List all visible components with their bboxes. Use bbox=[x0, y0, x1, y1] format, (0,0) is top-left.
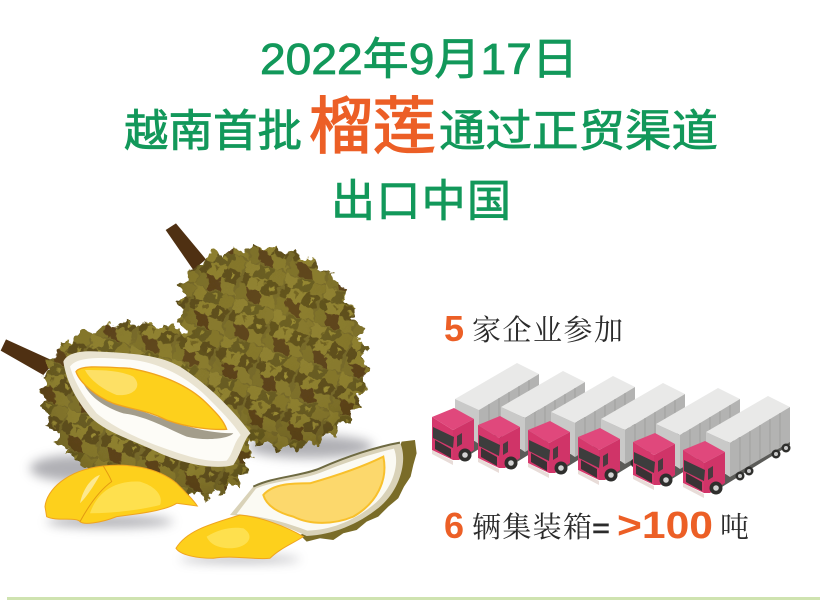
stat: containers and tonnage: 吨 bbox=[720, 511, 749, 544]
stat: companies: 5 bbox=[444, 308, 464, 349]
title line 2: first segment: 越南首批 bbox=[124, 107, 302, 156]
whole durian at back bbox=[166, 223, 369, 453]
flesh pieces left bbox=[45, 465, 197, 523]
segment pith bbox=[237, 449, 396, 531]
stat: containers and tonnage bbox=[444, 505, 749, 547]
title line 2: last segment: 通过正贸渠道 bbox=[439, 107, 718, 156]
flesh highlight bbox=[85, 370, 137, 395]
truck 6 bbox=[683, 396, 790, 498]
stat: companies bbox=[444, 308, 623, 349]
stat: containers and tonnage: 6 bbox=[444, 505, 464, 546]
opened durian bbox=[1, 319, 253, 502]
segment rind spikes bbox=[300, 440, 417, 542]
trucks bbox=[432, 363, 790, 498]
husk bbox=[63, 351, 251, 467]
truck 3 bbox=[528, 376, 636, 478]
stem bbox=[166, 223, 206, 270]
truck 5 bbox=[633, 388, 740, 490]
stat: containers and tonnage: >100 bbox=[617, 505, 713, 547]
flesh bbox=[76, 367, 227, 429]
truck 4 bbox=[578, 383, 686, 485]
segment rim bbox=[230, 443, 403, 536]
title line 3: 出口中国 bbox=[331, 177, 511, 226]
truck 2 bbox=[478, 371, 586, 473]
durian segment right bbox=[176, 440, 417, 559]
stat: containers and tonnage: 辆集装箱 bbox=[472, 511, 592, 544]
illustration: durians bbox=[1, 223, 417, 563]
segment dark top edge bbox=[253, 443, 400, 487]
truck 1 bbox=[432, 363, 540, 465]
title line 2: highlighted word: 榴莲 bbox=[309, 93, 436, 162]
title bbox=[124, 35, 718, 226]
ground shadows bbox=[30, 435, 373, 563]
title line 1: date: 2022年9月17日 bbox=[260, 35, 578, 84]
segment flesh bbox=[263, 457, 384, 523]
loose flesh bbox=[176, 515, 303, 559]
white pith bbox=[70, 358, 241, 461]
stat: containers and tonnage: = bbox=[592, 513, 610, 543]
stem bbox=[1, 339, 55, 375]
pith shadow bbox=[83, 383, 233, 439]
stat: companies: 家企业参加 bbox=[472, 314, 623, 347]
